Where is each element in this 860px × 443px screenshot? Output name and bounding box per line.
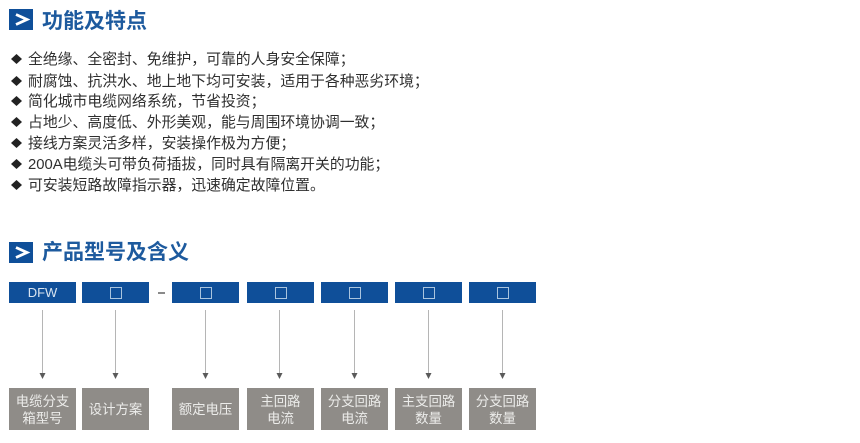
model code box: voltage [172,282,239,303]
arrow 2 [112,310,118,379]
label: main circuit current: 主回路 [260,394,301,409]
feature list: 可安装短路故障指示器，迅速确定故障位置。 [28,178,325,194]
label: main branch circuit count [395,388,462,430]
label: rated voltage: 额定电压 [179,402,232,417]
model code box: main current [247,282,314,303]
heading: model number meaning: 产品型号及含义 [42,241,189,264]
model code box: DFW: DFW [28,285,57,300]
heading: features: 功能及特点 [42,10,147,33]
label: main circuit current [247,388,314,430]
label: main circuit current: 电流 [267,411,294,426]
arrow 6 [426,310,432,379]
feature list: 占地少、高度低、外形美观，能与周围环境协调一致； [28,115,384,131]
dash separator [158,292,165,294]
feature list: 全绝缘、全密封、免维护，可靠的人身安全保障； [28,52,355,68]
label: cable branch box model: 箱型号 [22,411,63,426]
model code box: design [82,282,149,303]
label: main branch circuit count: 数量 [415,411,442,426]
label: design scheme [82,388,149,430]
model code box: branch count [469,282,536,303]
section icon: model chevron [9,242,33,263]
arrow 1 [40,310,46,379]
arrow 7 [500,310,506,379]
bullet 5 [11,135,295,152]
bullet 3 [11,93,266,110]
feature list: 200A电缆头可带负荷插拔，同时具有隔离开关的功能； [28,157,389,173]
bullet 4 [11,114,384,131]
label: design scheme: 设计方案 [89,402,142,417]
bullet 2 [11,73,429,90]
label: branch circuit current: 分支回路 [328,394,381,409]
label: branch circuit current [321,388,388,430]
arrow 5 [352,310,358,379]
label: branch circuit count [469,388,536,430]
label: cable branch box model: 电缆分支 [16,394,69,409]
label: branch circuit count: 数量 [489,411,516,426]
model code box: DFW [9,282,76,303]
label: main branch circuit count: 主支回路 [402,394,455,409]
feature list: 简化城市电缆网络系统，节省投资； [28,94,266,110]
arrow 4 [276,310,282,379]
bullet 1 [11,51,355,68]
bullet 7 [11,177,325,194]
arrow 3 [202,310,208,379]
section icon: features chevron [9,9,33,30]
label: branch circuit current: 电流 [341,411,368,426]
label: rated voltage [172,388,239,430]
feature list: 接线方案灵活多样，安装操作极为方便； [28,136,295,152]
model code box: branch current [321,282,388,303]
feature list [11,51,429,194]
feature list: 耐腐蚀、抗洪水、地上地下均可安装，适用于各种恶劣环境； [28,74,429,90]
bullet 6 [11,156,389,173]
label: cable branch box model [9,388,76,430]
model code box: main count [395,282,462,303]
label: branch circuit count: 分支回路 [476,394,529,409]
